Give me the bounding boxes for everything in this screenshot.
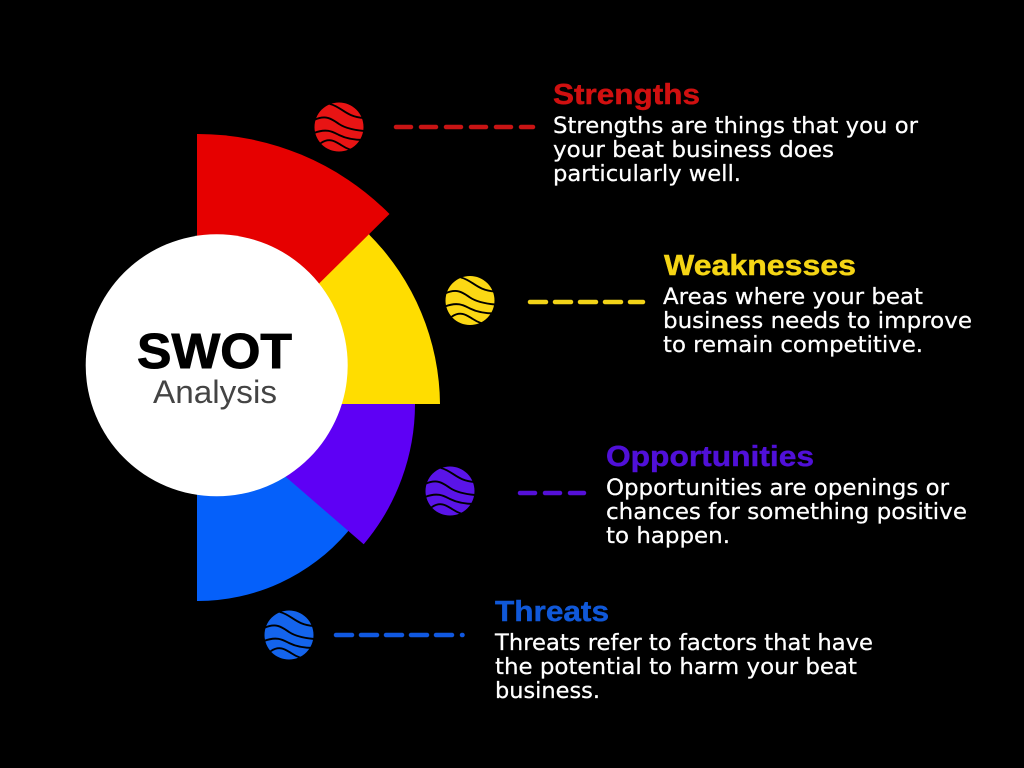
body: threats description: business. [495, 678, 600, 704]
title: SWOT: SWOT [137, 325, 292, 379]
chart: SWOT segmented half wheel [197, 134, 440, 601]
icon: weaknesses wave globe [445, 276, 495, 325]
body: strengths description: particularly well. [553, 161, 741, 187]
heading: Weaknesses: Weaknesses [664, 250, 856, 282]
icon: threats wave globe [264, 610, 314, 660]
icon: opportunities wave globe [425, 466, 475, 516]
dashed connector: weaknesses [530, 300, 643, 304]
text block: strengths [553, 79, 919, 187]
body: strengths description: Strengths are things that you or [553, 113, 919, 139]
body: weaknesses description: Areas where your beat [663, 284, 923, 310]
body: threats description: Threats refer to factors that have [494, 630, 873, 656]
body: weaknesses description: to remain competitive. [663, 332, 923, 358]
body: threats description: the potential to harm your beat [495, 654, 857, 680]
segment: threats [197, 404, 352, 601]
segment: weaknesses [197, 225, 440, 404]
dashed connector: opportunities [520, 491, 584, 495]
dashed connector: threats [336, 633, 462, 637]
body: opportunities description [606, 475, 967, 549]
subtitle: Analysis: Analysis [153, 374, 277, 410]
body: threats description [494, 630, 873, 704]
icon: strengths wave globe [314, 102, 364, 152]
dashed connector: strengths [396, 125, 533, 129]
body: opportunities description: to happen. [606, 523, 730, 549]
heading: Strengths: Strengths [553, 79, 700, 111]
body: weaknesses description: business needs to improve [663, 308, 972, 334]
heading: Opportunities: Opportunities [606, 441, 814, 473]
text block: threats [494, 596, 873, 704]
body: strengths description: your beat business does [553, 137, 834, 163]
body: weaknesses description [663, 284, 972, 358]
text block: weaknesses [663, 250, 972, 358]
body: strengths description [553, 113, 919, 187]
segment: opportunities [197, 400, 415, 544]
heading: Threats: Threats [495, 596, 609, 628]
segment: strengths [197, 134, 390, 404]
text block: opportunities [606, 441, 967, 549]
centre circle with title [86, 234, 348, 496]
body: opportunities description: Opportunities are openings or [606, 475, 950, 501]
body: opportunities description: chances for something positive [606, 499, 967, 525]
